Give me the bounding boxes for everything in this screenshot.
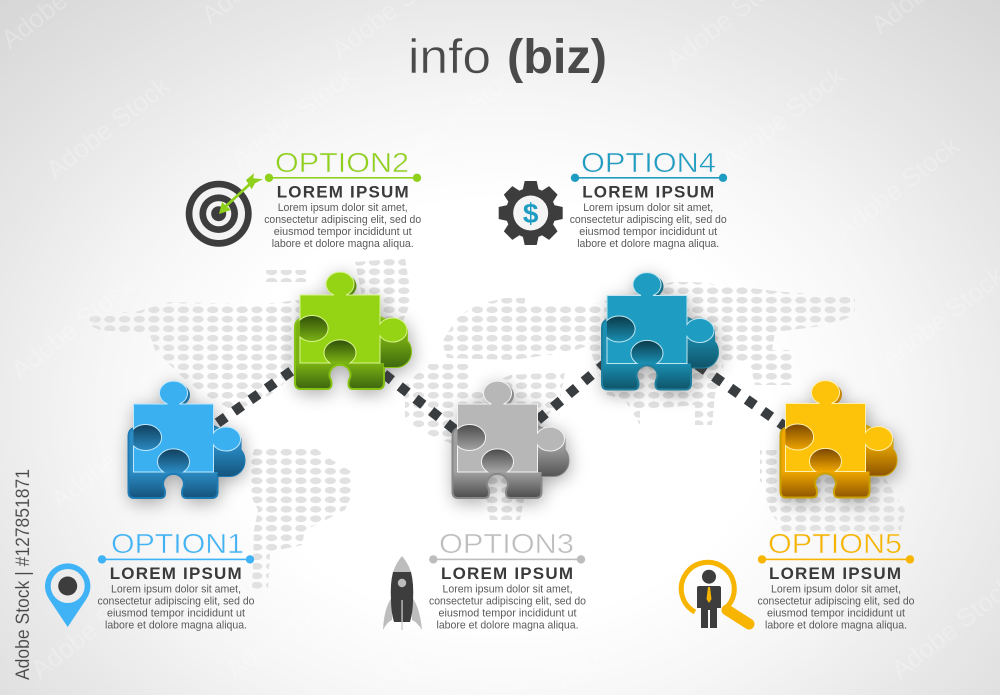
option 5 text: consectetur adipiscing elit, sed do	[758, 596, 914, 608]
option 1 text	[98, 584, 254, 632]
option 5 heading: OPTION5	[768, 528, 902, 559]
option 3 block	[429, 528, 586, 632]
option 3 heading: OPTION3	[439, 528, 574, 559]
option 1 rule	[98, 555, 254, 564]
option 3 rule	[429, 555, 585, 564]
option 2 rule	[265, 174, 421, 182]
option 3 subtitle: LOREM IPSUM	[441, 564, 573, 583]
dotted world map	[88, 258, 905, 590]
watermark: Adobe Stock	[225, 60, 361, 175]
option 2 text: labore et dolore magna aliqua.	[272, 238, 414, 250]
title	[408, 31, 607, 84]
option 2 block	[264, 147, 421, 250]
watermark: Adobe Stock	[45, 400, 181, 515]
option 1 text: eiusmod tempor incididunt ut	[107, 608, 245, 620]
option 5 text: labore et dolore magna aliqua.	[765, 620, 907, 632]
option 4 text: Lorem ipsum dolor sit amet,	[583, 202, 713, 214]
watermark: Adobe Stock	[25, 570, 161, 685]
option 1 subtitle: LOREM IPSUM	[110, 564, 242, 583]
puzzle piece: teal	[602, 273, 718, 390]
option 1 block	[98, 528, 254, 632]
option 4 block	[570, 147, 727, 250]
watermark: Adobe Stock	[220, 570, 356, 685]
option 4 text	[570, 202, 727, 250]
icon: target	[186, 173, 263, 247]
option 3 text: Lorem ipsum dolor sit amet,	[442, 584, 572, 596]
icon: rocket	[383, 556, 422, 630]
option 2 subtitle: LOREM IPSUM	[277, 182, 409, 201]
icon: gear with dollar: $	[523, 198, 539, 229]
watermark: Adobe Stock	[5, 270, 141, 385]
watermark: Adobe Stock	[365, 580, 501, 695]
puzzle piece: gray	[452, 381, 568, 498]
option 5 text: Lorem ipsum dolor sit amet,	[771, 584, 901, 596]
icon: location pin	[45, 563, 90, 627]
option 4 rule	[571, 174, 727, 182]
piece shadows	[130, 276, 899, 502]
puzzle piece: yellow	[780, 381, 896, 498]
option 3 text: eiusmod tempor incididunt ut	[438, 608, 576, 620]
option 2 text: eiusmod tempor incididunt ut	[274, 226, 412, 238]
icon: magnifier with person	[681, 562, 749, 628]
option 1 text: Lorem ipsum dolor sit amet,	[111, 584, 241, 596]
watermark: Adobe Stock	[715, 420, 851, 535]
option 5 text: eiusmod tempor incididunt ut	[767, 608, 905, 620]
option 5 text	[758, 584, 914, 632]
option 4 text: labore et dolore magna aliqua.	[577, 238, 719, 250]
title: (biz)	[507, 31, 607, 84]
watermark: Adobe Stock	[830, 130, 966, 245]
puzzle piece: green	[295, 272, 411, 389]
option 2 text: consectetur adipiscing elit, sed do	[264, 214, 421, 226]
stock id text: Adobe Stock | #127851871	[13, 469, 34, 680]
dashed connectors	[218, 360, 790, 434]
option 3 text: consectetur adipiscing elit, sed do	[429, 596, 586, 608]
option 1 heading: OPTION1	[111, 528, 244, 559]
title: info	[408, 31, 491, 84]
option 1 text: labore et dolore magna aliqua.	[105, 620, 247, 632]
option 4 heading: OPTION4	[581, 147, 716, 178]
option 5 rule	[758, 555, 914, 564]
puzzle piece: blue	[128, 381, 244, 498]
watermark: Adobe Stock	[40, 70, 176, 185]
watermark: Adobe Stock	[715, 60, 851, 175]
option 3 text	[429, 584, 586, 632]
option 2 heading: OPTION2	[275, 147, 409, 178]
icon: gear with dollar	[499, 181, 563, 245]
option 4 subtitle: LOREM IPSUM	[582, 182, 714, 201]
option 1 text: consectetur adipiscing elit, sed do	[98, 596, 254, 608]
option 3 text: labore et dolore magna aliqua.	[436, 620, 578, 632]
option 4 text: eiusmod tempor incididunt ut	[579, 226, 717, 238]
option 2 text: Lorem ipsum dolor sit amet,	[278, 202, 408, 214]
option 5 block	[758, 528, 914, 632]
option 5 subtitle: LOREM IPSUM	[769, 564, 901, 583]
option 2 text	[264, 202, 421, 250]
option 4 text: consectetur adipiscing elit, sed do	[570, 214, 727, 226]
watermark: Adobe Stock	[395, 55, 531, 170]
watermark: Adobe Stock	[550, 580, 686, 695]
watermark: Adobe Stock	[375, 415, 511, 530]
